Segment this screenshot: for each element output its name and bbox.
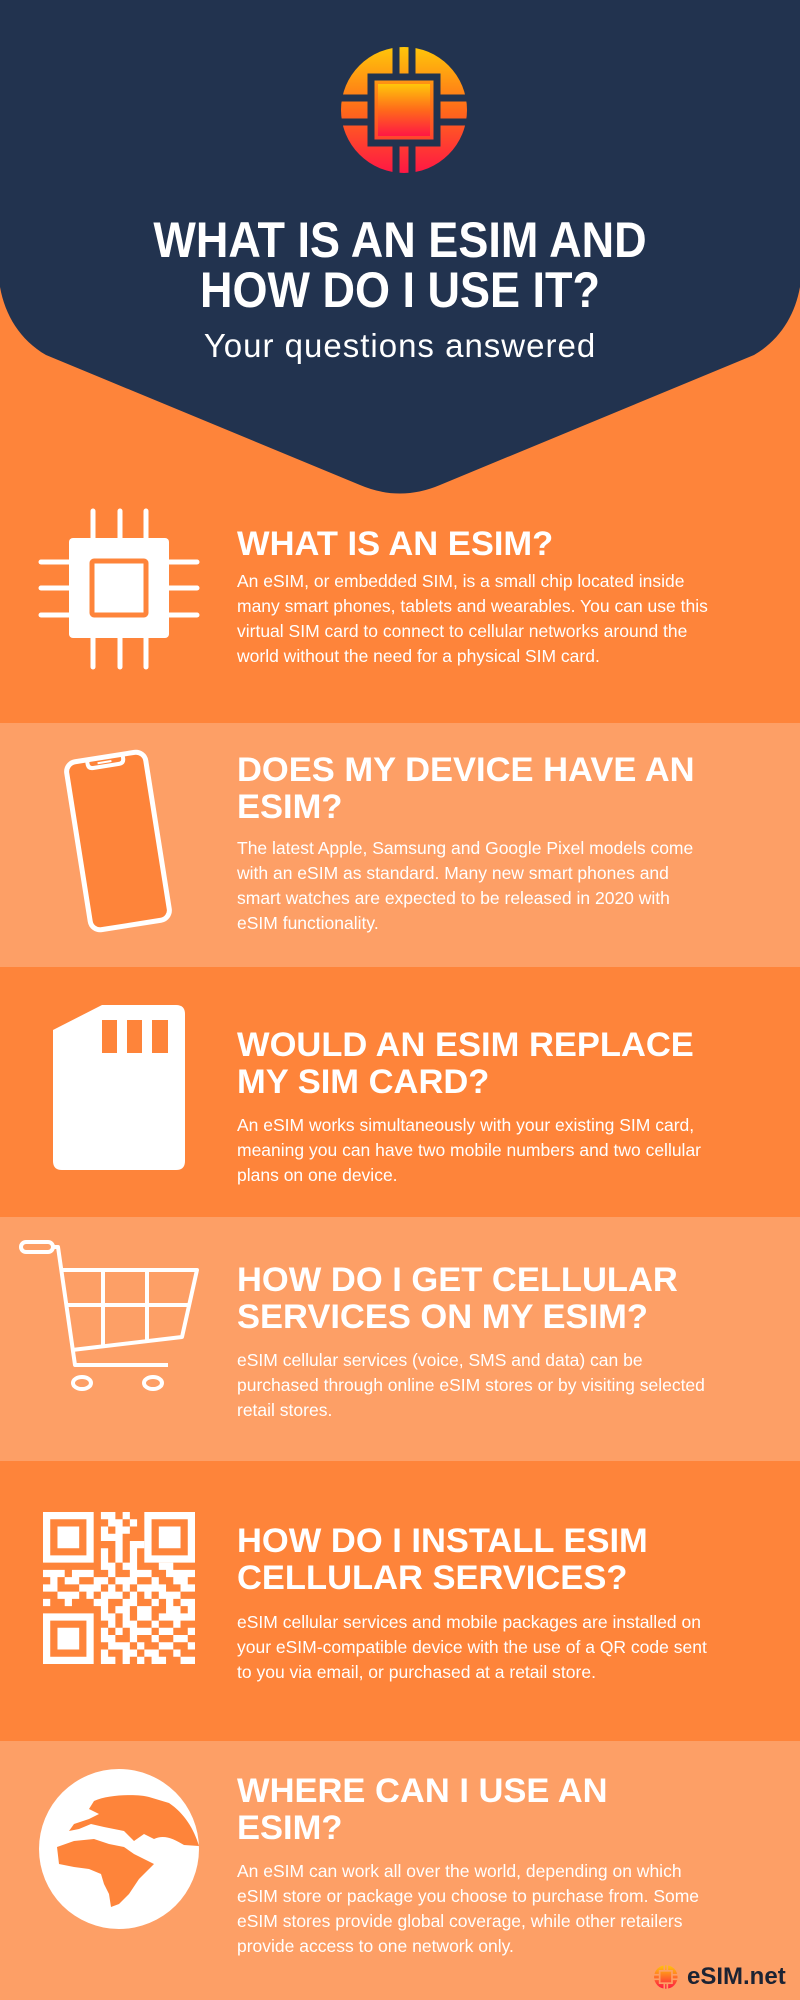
- text: where use: eSIM stores provide global coverage, while other retailers: [237, 1911, 682, 1931]
- text: where use: [237, 1861, 699, 1956]
- text: does my device: [237, 838, 693, 933]
- panel: does my device: [0, 723, 800, 967]
- panel: install: [0, 1461, 800, 1741]
- text: what is an esim: many smart phones, tablets and wearables. You can use this: [237, 596, 708, 616]
- heading: what is an esim: WHAT IS AN ESIM?: [237, 525, 553, 563]
- icon: chip: [38, 508, 200, 670]
- title: WHAT IS AN ESIM AND: [153, 212, 647, 268]
- heading: where use: WHERE CAN I USE AN: [237, 1772, 608, 1810]
- subtitle: Your questions answered: [204, 327, 596, 364]
- text: does my device: smart watches are expected to be released in 2020 with: [237, 888, 670, 908]
- text: install: to you via email, or purchased at a retail store.: [237, 1662, 596, 1682]
- text: does my device: The latest Apple, Samsung and Google Pixel models come: [237, 838, 693, 858]
- text: get cellular services: retail stores.: [237, 1400, 332, 1420]
- text: get cellular services: [237, 1350, 705, 1420]
- icon: phone: [64, 750, 172, 932]
- text: install: [237, 1612, 707, 1682]
- heading: where use: [237, 1772, 608, 1847]
- text: what is an esim: [237, 571, 708, 666]
- heading: get cellular services: [237, 1261, 678, 1336]
- text: what is an esim: An eSIM, or embedded SIM, is a small chip located inside: [237, 571, 684, 591]
- icon: small logo: [654, 1965, 678, 1989]
- heading: install: HOW DO I INSTALL ESIM: [237, 1522, 648, 1560]
- logo text: eSIM.net: [687, 1963, 786, 1990]
- panel: replace sim: [0, 967, 800, 1217]
- text: get cellular services: eSIM cellular services (voice, SMS and data) can be: [237, 1350, 643, 1370]
- text: where use: An eSIM can work all over the world, depending on which: [237, 1861, 682, 1881]
- text: does my device: eSIM functionality.: [237, 913, 379, 933]
- heading: install: CELLULAR SERVICES?: [237, 1559, 627, 1597]
- heading: does my device: [237, 751, 695, 826]
- panel: get cellular services: [0, 1217, 800, 1461]
- text: replace sim: meaning you can have two mobile numbers and two cellular: [237, 1140, 701, 1160]
- text: where use: eSIM store or package you choose to purchase from. Some: [237, 1886, 699, 1906]
- footer logo: [654, 1963, 786, 1990]
- panel: what is an esim: [0, 0, 800, 723]
- heading: replace sim: WOULD AN ESIM REPLACE: [237, 1026, 694, 1064]
- text: replace sim: [237, 1115, 701, 1185]
- text: replace sim: plans on one device.: [237, 1165, 398, 1185]
- icon: logo chip: [341, 47, 467, 173]
- icon: sim card: [53, 1005, 185, 1170]
- text: where use: provide access to one network only.: [237, 1936, 514, 1956]
- text: get cellular services: purchased through online eSIM stores or by visiting selected: [237, 1375, 705, 1395]
- heading: replace sim: [237, 1026, 694, 1101]
- text: install: eSIM cellular services and mobile packages are installed on: [237, 1612, 701, 1632]
- heading: does my device: DOES MY DEVICE HAVE AN: [237, 751, 695, 789]
- heading: install: [237, 1522, 648, 1597]
- text: install: your eSIM-compatible device with the use of a QR code sent: [237, 1637, 707, 1657]
- icon: shopping cart: [19, 1240, 199, 1391]
- heading: does my device: ESIM?: [237, 788, 342, 826]
- text: does my device: with an eSIM as standard. Many new smart phones and: [237, 863, 669, 883]
- icon: qr code: [43, 1512, 195, 1664]
- heading: get cellular services: HOW DO I GET CELLULAR: [237, 1261, 678, 1299]
- header background: [0, 0, 800, 494]
- text: what is an esim: virtual SIM card to connect to cellular networks around the: [237, 621, 687, 641]
- title: HOW DO I USE IT?: [200, 262, 600, 318]
- icon: globe: [39, 1769, 199, 1929]
- heading: replace sim: MY SIM CARD?: [237, 1063, 489, 1101]
- heading: get cellular services: SERVICES ON MY ESIM?: [237, 1298, 648, 1336]
- text: what is an esim: world without the need for a physical SIM card.: [237, 646, 600, 666]
- text: replace sim: An eSIM works simultaneously with your existing SIM card,: [237, 1115, 694, 1135]
- heading: where use: ESIM?: [237, 1809, 342, 1847]
- panel: where use: [0, 1741, 800, 2000]
- title: [153, 212, 647, 318]
